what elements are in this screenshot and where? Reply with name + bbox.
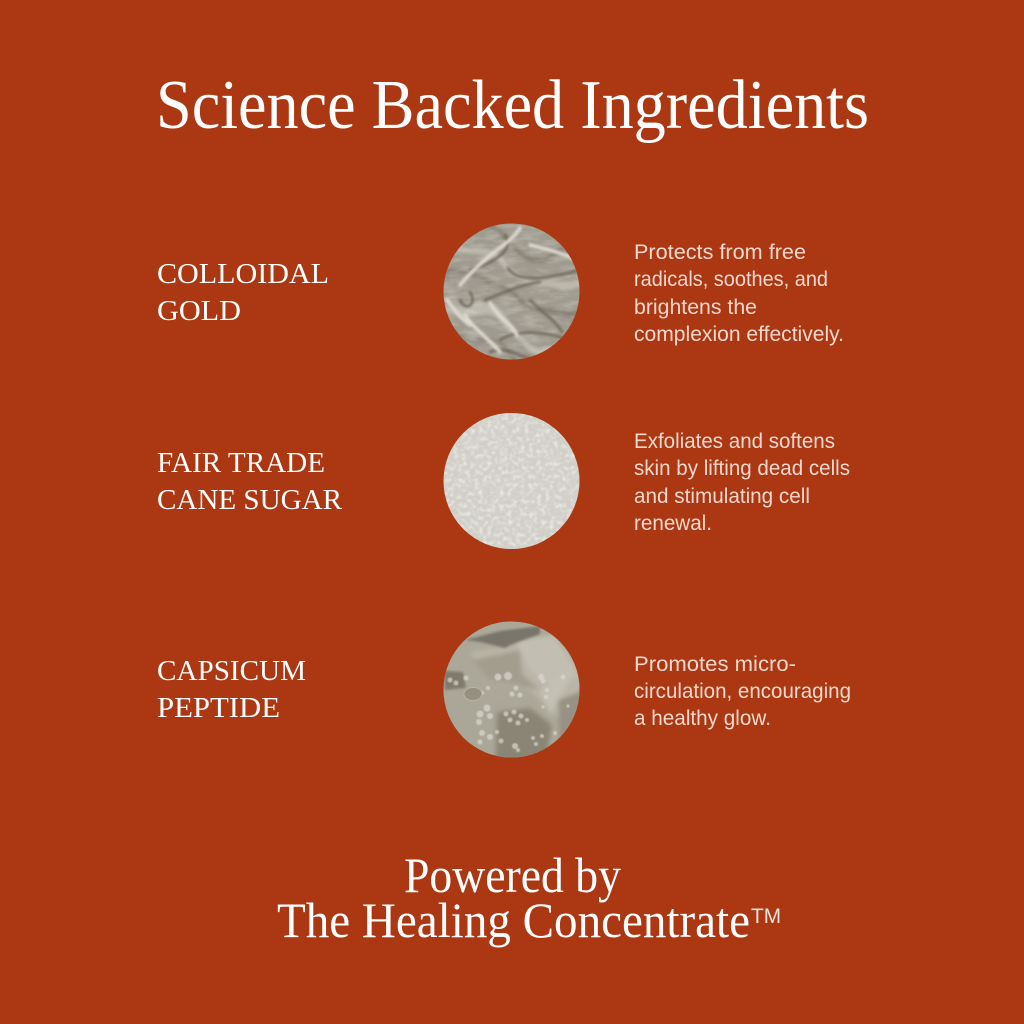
description: capsicum peptide: circulation, encouraging <box>634 679 851 703</box>
description: cane sugar: skin by lifting dead cells <box>634 456 850 480</box>
description: colloidal gold <box>634 240 844 346</box>
ingredient name: capsicum peptide: PEPTIDE <box>157 692 280 724</box>
closing statement: Powered by <box>404 847 621 903</box>
closing statement: TM <box>751 905 781 928</box>
image: swirling gold texture <box>444 224 580 360</box>
ingredient name: colloidal gold: COLLOIDAL <box>157 258 329 290</box>
image: sugar crystals <box>443 412 580 550</box>
ingredient name: colloidal gold <box>157 258 329 327</box>
description: cane sugar: and stimulating cell <box>634 484 810 508</box>
description: colloidal gold: Protects from free <box>634 240 806 264</box>
ingredient name: fair trade cane sugar <box>157 447 343 516</box>
closing statement: The Healing Concentrate <box>277 892 750 948</box>
panel: capsicum peptide row <box>157 621 851 765</box>
ingredient name: colloidal gold: GOLD <box>157 295 241 327</box>
description: cane sugar <box>634 429 850 535</box>
description: colloidal gold: radicals, soothes, and <box>634 267 828 291</box>
ingredient name: capsicum peptide: CAPSICUM <box>157 655 306 687</box>
title: Science Backed Ingredients <box>156 67 869 144</box>
description: colloidal gold: complexion effectively. <box>634 322 844 346</box>
panel: fair trade cane sugar row <box>157 412 850 550</box>
panel: colloidal gold row <box>158 224 842 360</box>
description: capsicum peptide: Promotes micro- <box>634 652 796 676</box>
ingredient name: fair trade cane sugar: CANE SUGAR <box>157 484 343 516</box>
description: cane sugar: Exfoliates and softens <box>634 429 835 453</box>
description: capsicum peptide: a healthy glow. <box>634 706 771 730</box>
image: clear gel with bubbles <box>444 622 580 758</box>
description: colloidal gold: brightens the <box>634 295 757 319</box>
ingredient name: capsicum peptide <box>157 655 306 724</box>
ingredient name: fair trade cane sugar: FAIR TRADE <box>157 447 325 479</box>
closing statement <box>277 847 781 948</box>
description: cane sugar: renewal. <box>634 511 712 535</box>
description: capsicum peptide <box>634 652 851 730</box>
